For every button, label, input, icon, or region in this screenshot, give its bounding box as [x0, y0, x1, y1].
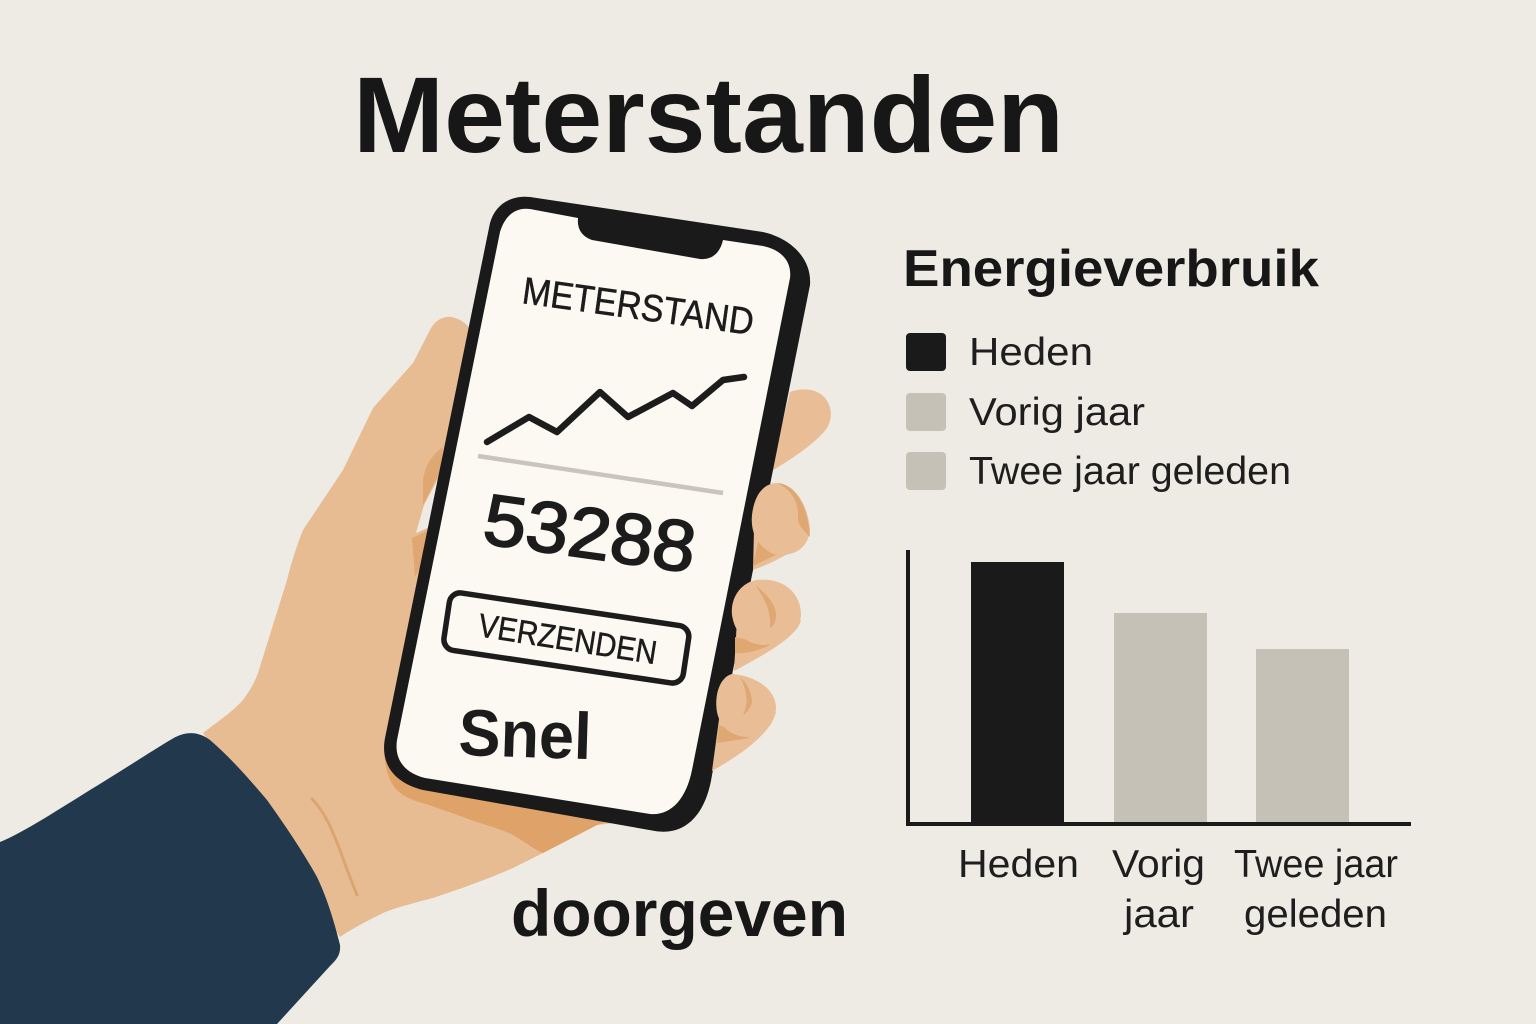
wrist crease	[312, 799, 357, 895]
bar: twee jaar geleden	[1256, 649, 1349, 823]
sleeve	[0, 733, 340, 1024]
axis label: vorig jaar: Vorig	[1112, 843, 1205, 886]
legend: heden	[906, 331, 1093, 374]
screen heading: METERSTAND	[520, 270, 756, 344]
title: Meterstanden	[353, 54, 1064, 175]
bar: vorig jaar	[1114, 613, 1207, 823]
axis label: twee jaar geleden	[1234, 843, 1398, 936]
axis label: twee jaar geleden: geleden	[1244, 893, 1387, 936]
line chart	[487, 377, 744, 442]
phone screen	[397, 209, 790, 814]
finger: third	[732, 580, 801, 671]
bar: heden	[971, 562, 1064, 823]
send button: VERZENDEN	[476, 606, 659, 671]
meter reading: 53288	[479, 480, 701, 588]
send button	[442, 591, 690, 685]
quick label: Snel	[458, 695, 593, 773]
axis label: heden: Heden	[958, 843, 1079, 886]
legend: heden: Heden	[969, 331, 1093, 374]
chart heading: Energieverbruik	[903, 240, 1319, 298]
phone	[384, 197, 810, 832]
legend: vorig jaar	[906, 391, 1145, 434]
finger: top	[770, 389, 831, 472]
axes	[908, 550, 1411, 824]
divider	[478, 456, 723, 493]
phone body	[384, 197, 810, 832]
shadow under phone	[384, 745, 640, 853]
gap between hand and phone	[416, 475, 445, 533]
thumb shade	[423, 447, 443, 505]
fingers over phone	[712, 483, 810, 771]
palm shade	[412, 530, 429, 577]
hand and palm	[203, 317, 640, 937]
illustration: hand behind phone	[203, 317, 831, 937]
axis label: vorig jaar: jaar	[1123, 893, 1194, 936]
axis label: vorig jaar	[1112, 843, 1205, 936]
axis label: twee jaar geleden: Twee jaar	[1234, 843, 1398, 886]
finger: fourth	[712, 674, 776, 771]
bar chart	[908, 550, 1411, 936]
legend: vorig jaar: Vorig jaar	[969, 391, 1145, 434]
legend	[906, 331, 1291, 493]
subtitle: doorgeven	[511, 876, 848, 950]
finger: second	[752, 483, 810, 570]
legend: twee jaar geleden: Twee jaar geleden	[969, 450, 1291, 493]
